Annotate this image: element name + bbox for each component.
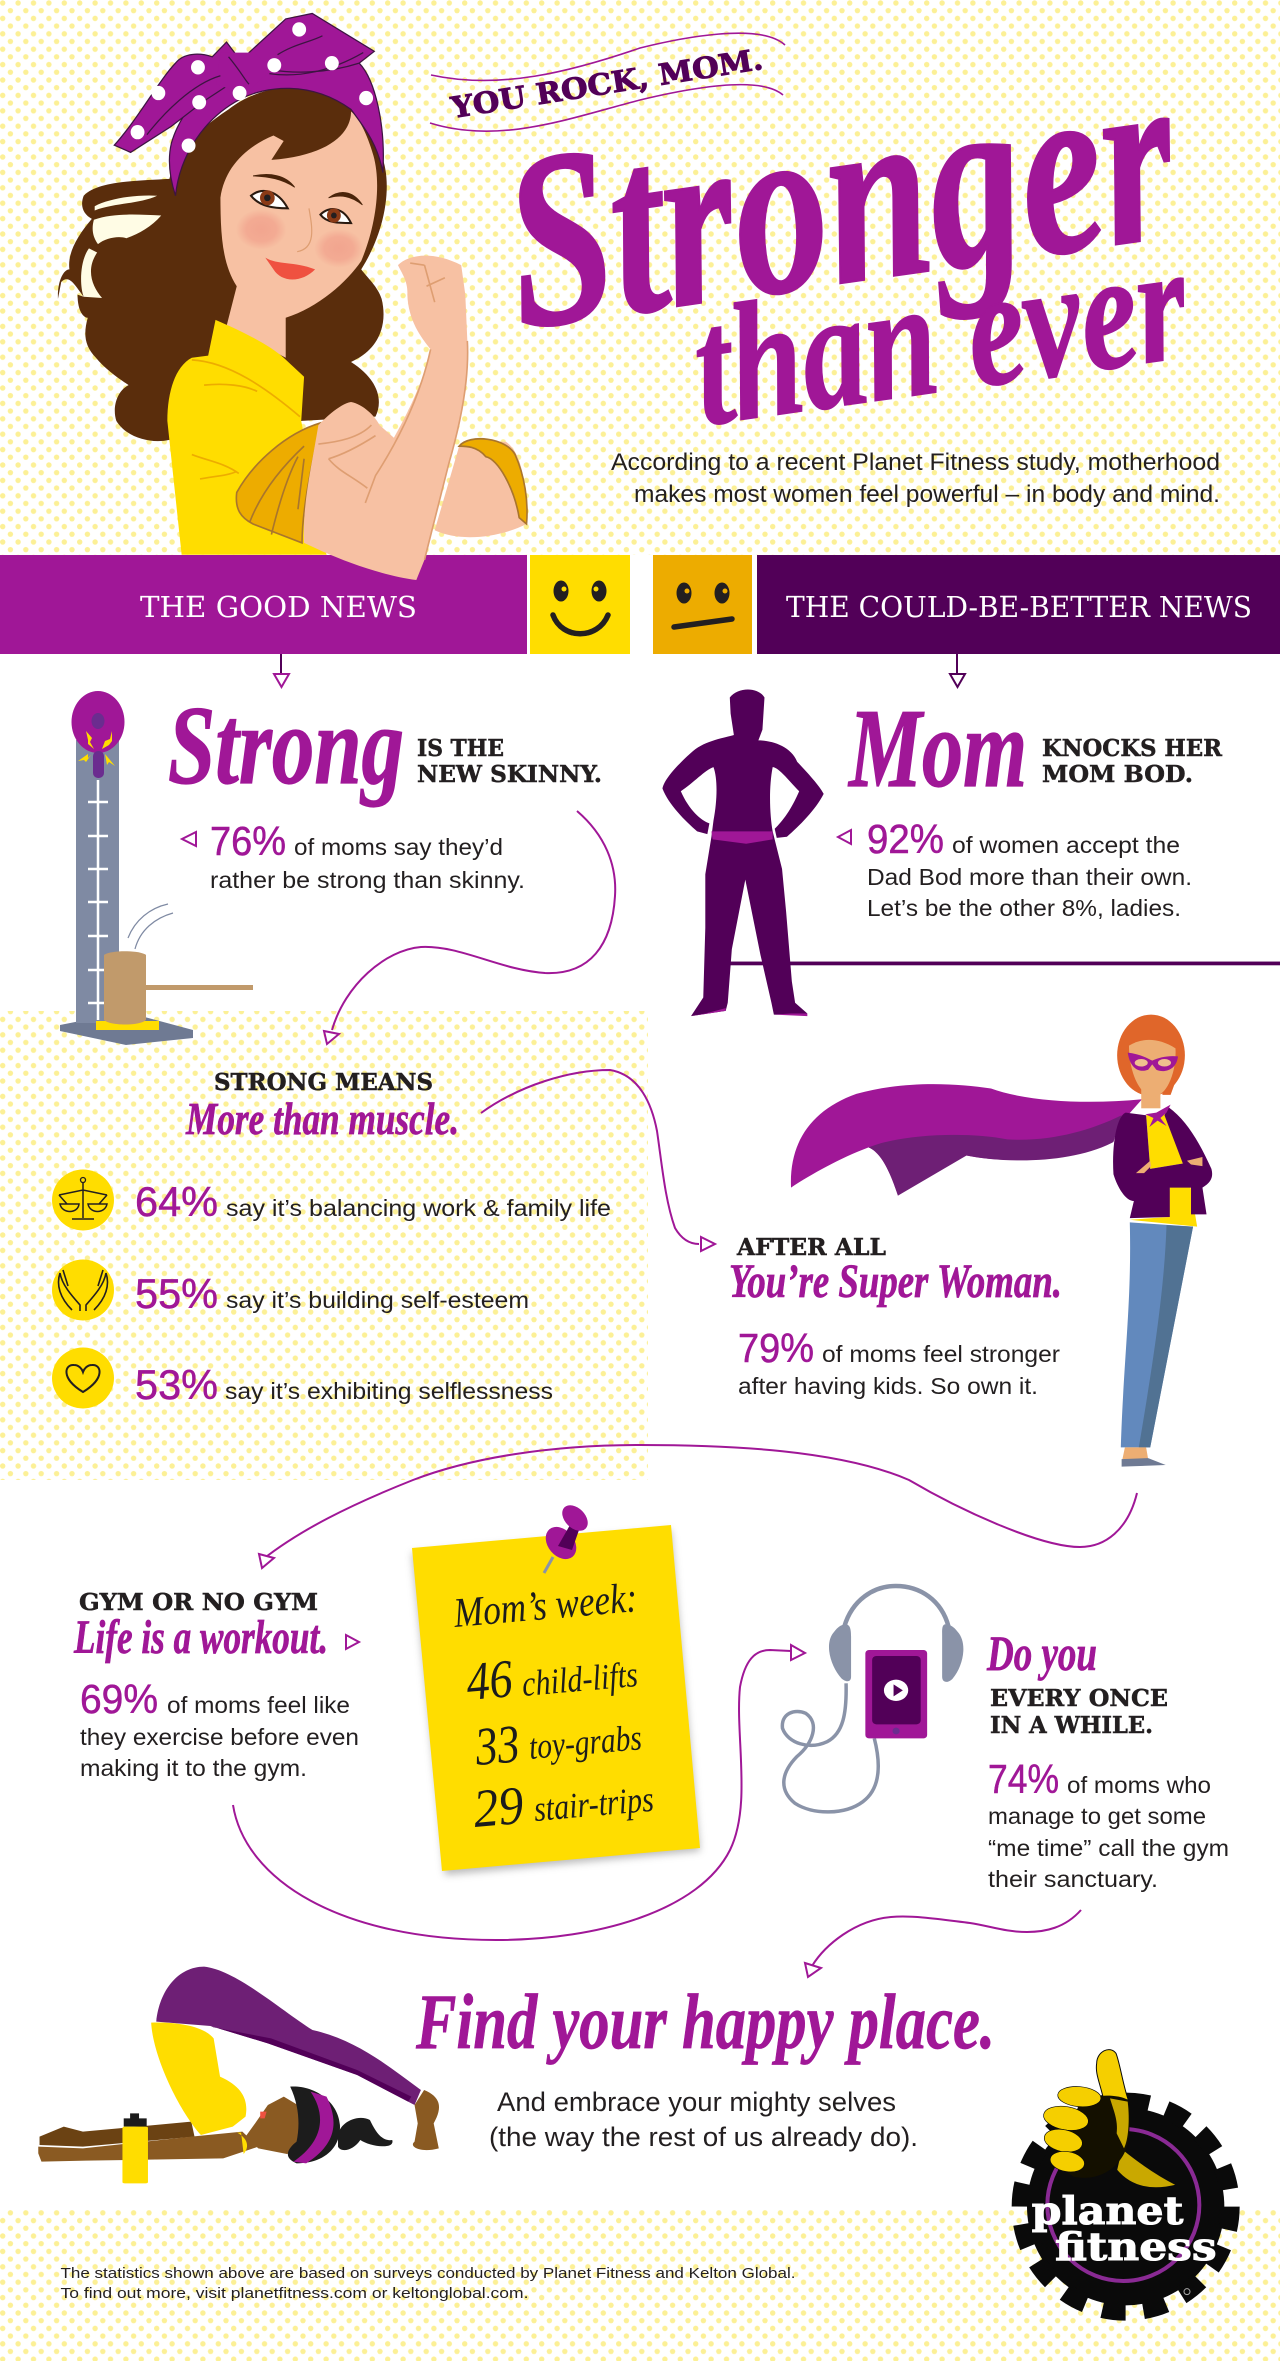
intro text: According to a recent Planet Fitness study, motherhood — [611, 449, 1220, 476]
text: you are super woman: after having kids. So own it. — [738, 1373, 1038, 1399]
neck — [1141, 1086, 1160, 1108]
arrow: curve to super woman — [481, 1070, 715, 1251]
arrow: curve to music player — [233, 1645, 805, 1940]
banner: the good news — [0, 555, 527, 654]
legs — [156, 1967, 421, 2105]
heading: find your happy place: Find your happy place. — [415, 1978, 995, 2065]
bandana — [169, 55, 383, 196]
stat: 76 percent — [182, 818, 525, 893]
base — [60, 1012, 193, 1045]
arrow: better news down — [950, 654, 965, 687]
gear — [1027, 2108, 1224, 2305]
illustration: super woman — [791, 1015, 1212, 1467]
stat: 92 percent: Dad Bod more than their own. — [867, 864, 1192, 890]
sleeve — [236, 423, 320, 543]
back arm — [435, 439, 527, 537]
bell — [72, 691, 124, 753]
text: do you every once in a while — [986, 1625, 1229, 1892]
mask — [1128, 1053, 1178, 1071]
illustration: man silhouette dad bod — [662, 689, 1280, 1016]
sticky note: mom's week: 46 — [464, 1648, 515, 1712]
scale — [88, 780, 108, 1020]
closing text: (the way the rest of us already do). — [489, 2122, 918, 2152]
shirt — [1130, 1113, 1197, 1227]
text: life is a workout: 69% — [80, 1676, 158, 1722]
front arm — [38, 2132, 258, 2162]
player — [865, 1650, 927, 1738]
cord — [782, 1683, 878, 1812]
ring — [1047, 2129, 1199, 2281]
text: life is a workout: of moms feel like — [167, 1692, 350, 1718]
footnote: To find out more, visit planetfitness.com or keltonglobal.com. — [60, 2285, 528, 2302]
icon: balance scale — [52, 1170, 114, 1230]
heading: strong is the new skinny: IS THE — [417, 735, 504, 762]
stat row: exhibiting selflessness — [52, 1348, 553, 1408]
stat row: building self-esteem — [52, 1260, 529, 1320]
text: do you every once in a while: Do you — [986, 1625, 1097, 1681]
icon: open hands — [52, 1260, 114, 1320]
stat: 92 percent: of women accept the — [952, 832, 1180, 858]
text: you are super woman: You’re Super Woman. — [729, 1255, 1062, 1308]
stat row: balancing work and family — [52, 1170, 611, 1230]
wrist — [1117, 2148, 1177, 2188]
text: do you every once in a while: of moms who — [1067, 1772, 1211, 1798]
illustration: yoga plow pose — [38, 1967, 439, 2183]
arrow: curve to find your happy place — [805, 1910, 1081, 1977]
heading: mom knocks her mom bod: Mom — [848, 687, 1027, 811]
text: life is a workout: making it to the gym. — [80, 1755, 307, 1781]
registered mark — [1184, 2289, 1190, 2295]
illustration: high striker — [60, 691, 253, 1045]
sticky note: mom's week — [412, 1500, 700, 1875]
ribbon: you rock mom: YOU ROCK, MOM. — [448, 42, 765, 125]
text: life is a workout: Life is a workout. — [73, 1611, 328, 1664]
sticky note: mom's week: stair-trips — [532, 1779, 655, 1829]
sticky note: mom's week: 29 — [471, 1775, 526, 1839]
flexed arm — [304, 256, 468, 580]
mouth — [265, 258, 315, 279]
cape — [791, 1084, 1142, 1196]
intro text — [611, 449, 1220, 508]
hair — [58, 86, 387, 441]
hands — [1136, 1157, 1202, 1173]
face and neck — [246, 2097, 313, 2154]
headband — [844, 1586, 949, 1627]
stat row: building self-esteem: say it’s building self-esteem — [226, 1287, 529, 1313]
fingers — [1042, 2085, 1102, 2175]
palm — [1060, 2096, 1130, 2178]
text: life is a workout — [73, 1589, 359, 1781]
jeans — [1121, 1222, 1193, 1447]
heading: mom knocks her mom bod — [848, 687, 1223, 811]
striker weight — [93, 751, 104, 778]
text: you are super woman: of moms feel stronger — [822, 1341, 1060, 1367]
intro text: makes most women feel powerful – in body and mind. — [634, 481, 1220, 508]
arrow: long curve to gym — [259, 1445, 1137, 1568]
headband — [293, 2092, 334, 2163]
sticky note: mom's week: Mom’s week: — [451, 1575, 639, 1637]
heading: mom knocks her mom bod: KNOCKS HER — [1042, 735, 1223, 762]
bandana knot — [216, 53, 271, 95]
heading: strong means more than muscle: STRONG MEANS — [214, 1069, 433, 1096]
right eye — [320, 209, 351, 223]
stat row: exhibiting selflessness: 53% — [135, 1361, 218, 1408]
belt — [711, 831, 773, 844]
stat row: balancing work and family: say it’s balancing work & family life — [226, 1195, 611, 1221]
heading: mom knocks her mom bod: MOM BOD. — [1042, 761, 1193, 788]
footnote — [60, 2265, 796, 2302]
banner: the could-be-better news — [757, 555, 1280, 654]
nose — [297, 208, 312, 252]
icon: smiley face — [530, 555, 630, 654]
text: you are super woman: AFTER ALL — [736, 1234, 886, 1261]
sticky note: mom's week: 33 — [472, 1713, 522, 1777]
stat: 92 percent: 92% — [867, 816, 944, 862]
text: life is a workout: they exercise before even — [80, 1724, 359, 1750]
face and neck — [220, 112, 377, 358]
stat: 76 percent: 76% — [210, 818, 286, 864]
icon: heart — [52, 1348, 114, 1408]
text: you are super woman: 79% — [738, 1325, 814, 1371]
text: do you every once in a while: “me time” call the gym — [988, 1835, 1229, 1861]
foot — [413, 2090, 439, 2150]
foot — [1122, 1447, 1148, 1459]
icon: neutral face — [653, 555, 752, 654]
motion lines — [128, 904, 173, 949]
scarf — [1145, 1105, 1171, 1127]
text: do you every once in a while: EVERY ONCE — [990, 1685, 1168, 1712]
illustration: headphones and music player — [782, 1586, 963, 1812]
hair wisp gaps — [81, 195, 161, 298]
stat row: building self-esteem: 55% — [135, 1270, 218, 1317]
ponytail — [338, 2118, 392, 2150]
sticky note: mom's week: toy-grabs — [527, 1717, 643, 1767]
logo: planet fitness — [1021, 2050, 1230, 2311]
text: you are super woman — [729, 1234, 1062, 1399]
hair — [288, 2087, 340, 2163]
mallet plate — [96, 1021, 159, 1030]
shirt — [167, 320, 327, 555]
heading: strong means more than muscle: More than muscle. — [185, 1093, 459, 1144]
icon: push pin — [539, 1500, 593, 1573]
logo: planet fitness: fitness — [1055, 2225, 1217, 2270]
closing text — [489, 2087, 918, 2152]
wordmark: planet — [1032, 2189, 1184, 2234]
shoe — [1122, 1458, 1166, 1467]
pole — [76, 740, 119, 1023]
left eye — [251, 191, 288, 208]
stat: 92 percent: Let’s be the other 8%, ladies. — [867, 895, 1181, 921]
bottle — [124, 2113, 147, 2127]
footnote: The statistics shown above are based on surveys conducted by Planet Fitness and Kelton Global. — [60, 2265, 796, 2282]
heading: strong is the new skinny: NEW SKINNY. — [417, 761, 602, 788]
stat: 92 percent — [838, 816, 1192, 921]
back arm — [40, 2122, 195, 2147]
text: do you every once in a while: their sanctuary. — [988, 1866, 1158, 1892]
banner: the good news: THE GOOD NEWS — [140, 590, 417, 624]
banner: the could-be-better news: THE COULD-BE-BETTER NEWS — [786, 590, 1252, 624]
face — [1129, 1040, 1176, 1097]
stat row: exhibiting selflessness: say it’s exhibiting selflessness — [225, 1378, 553, 1404]
hair — [1117, 1015, 1185, 1096]
sticky note: mom's week: child-lifts — [520, 1654, 639, 1704]
closing text: And embrace your mighty selves — [497, 2087, 896, 2117]
text: do you every once in a while: manage to get some — [988, 1803, 1206, 1829]
ribbon: you rock mom — [430, 33, 785, 131]
sparks — [78, 731, 115, 766]
jacket — [1113, 1107, 1212, 1218]
text: do you every once in a while: IN A WHILE. — [990, 1712, 1153, 1739]
background: strong means dotted panel — [0, 1011, 648, 1480]
shirt — [151, 2023, 246, 2135]
heading: strong is the new skinny: Strong — [168, 684, 404, 808]
text: life is a workout: GYM OR NO GYM — [79, 1589, 318, 1616]
background: footer dotted area — [0, 2210, 1280, 2361]
illustration: woman flexing arm — [58, 13, 527, 580]
shoes — [691, 1008, 807, 1016]
ear cups — [829, 1624, 851, 1681]
arrow: curve to strong means — [324, 811, 615, 1044]
stat row: balancing work and family: 64% — [135, 1178, 218, 1225]
stat: 76 percent: rather be strong than skinny. — [210, 867, 525, 893]
cheeks — [236, 209, 287, 250]
body — [662, 689, 824, 1016]
thumb — [1096, 2050, 1128, 2100]
text: do you every once in a while: 74% — [988, 1756, 1059, 1802]
mallet — [146, 985, 253, 990]
ground line — [730, 962, 1280, 965]
heading: strong means more than muscle — [185, 1069, 459, 1144]
background: top dotted area — [0, 0, 1280, 555]
stat: 76 percent: of moms say they’d — [294, 834, 503, 860]
arrow: good news down — [274, 654, 289, 687]
